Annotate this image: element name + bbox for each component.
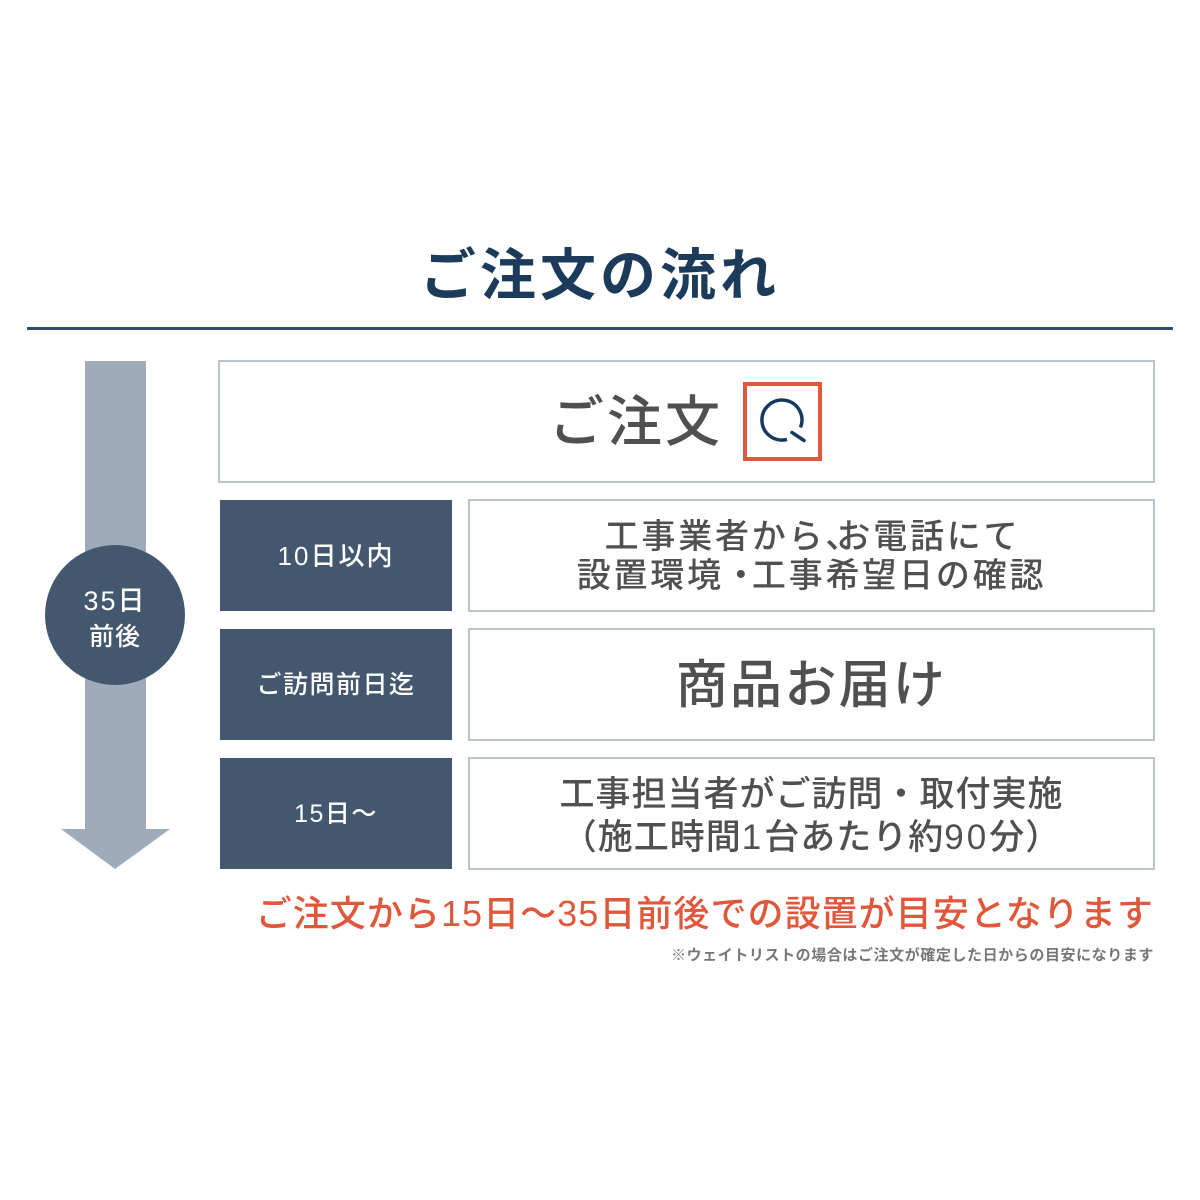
label text: ご訪問前日迄 (256, 671, 416, 699)
label: day before visit (220, 629, 452, 740)
label: within 10 days (220, 500, 452, 611)
duration text: 35日 (83, 586, 147, 616)
panel: installation (468, 757, 1155, 870)
order text: ご注文 (549, 391, 723, 453)
installation text (559, 775, 1064, 857)
duration text: 前後 (89, 623, 141, 651)
red note: ご注文から15日～35日前後での設置が目安となります (256, 893, 1154, 934)
label text: 10日以内 (278, 541, 394, 571)
phone call text: 工事業者から、お電話にて (605, 518, 1020, 556)
panel: delivery (468, 628, 1155, 741)
label: from day 15 (220, 758, 452, 869)
delivery text: 商品お届け (676, 657, 947, 715)
duration circle (45, 545, 185, 685)
phone call text (577, 518, 1046, 595)
installation text: 工事担当者がご訪問・取付実施 (559, 775, 1064, 814)
footnote: ※ウェイトリストの場合はご注文が確定した日からの目安になります (671, 947, 1154, 964)
title rule (27, 327, 1173, 330)
panel: phone call (468, 499, 1155, 612)
panel: order (218, 360, 1155, 483)
icon: Q logo (743, 382, 822, 461)
phone call text: 設置環境・工事希望日の確認 (577, 557, 1046, 595)
label text: 15日～ (294, 800, 378, 828)
title: ご注文の流れ (420, 244, 780, 307)
installation text: （施工時間1台あたり約90分） (562, 818, 1061, 857)
duration text (83, 586, 147, 651)
timeline arrow (61, 361, 170, 869)
